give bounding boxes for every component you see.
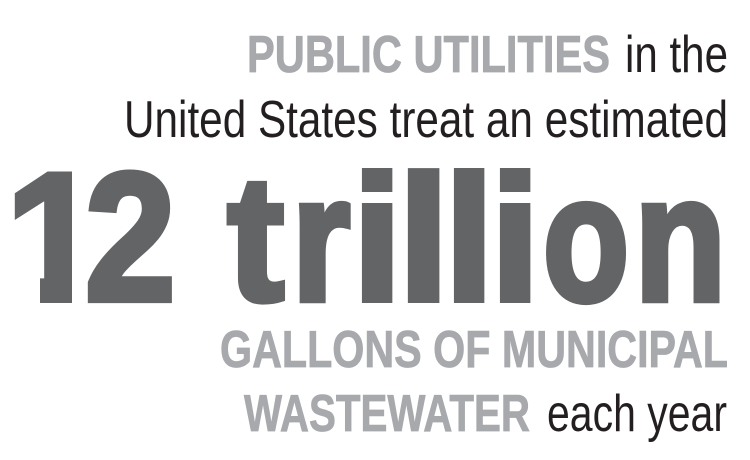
big number: 12 trillion: n — [634, 139, 726, 338]
big number: 12 trillion: 2 — [85, 134, 176, 339]
big number: 12 trillion: r — [292, 139, 350, 338]
big number: 12 trillion: 1 — [6, 136, 105, 339]
heading line 1: in the — [625, 26, 728, 84]
heading line 1: PUBLIC UTILITIES — [247, 26, 610, 84]
big number: 12 trillion: l — [444, 139, 494, 338]
subheading line 2: WASTEWATER — [244, 385, 530, 443]
big number: 12 trillion — [14, 168, 720, 306]
big number: 12 trillion: t — [227, 139, 284, 338]
big number: 12 trillion: l — [398, 140, 449, 338]
big number: 12 trillion: o — [543, 139, 629, 338]
big number: 12 trillion: i — [352, 139, 402, 338]
big number: 12 trillion: i — [490, 139, 540, 338]
